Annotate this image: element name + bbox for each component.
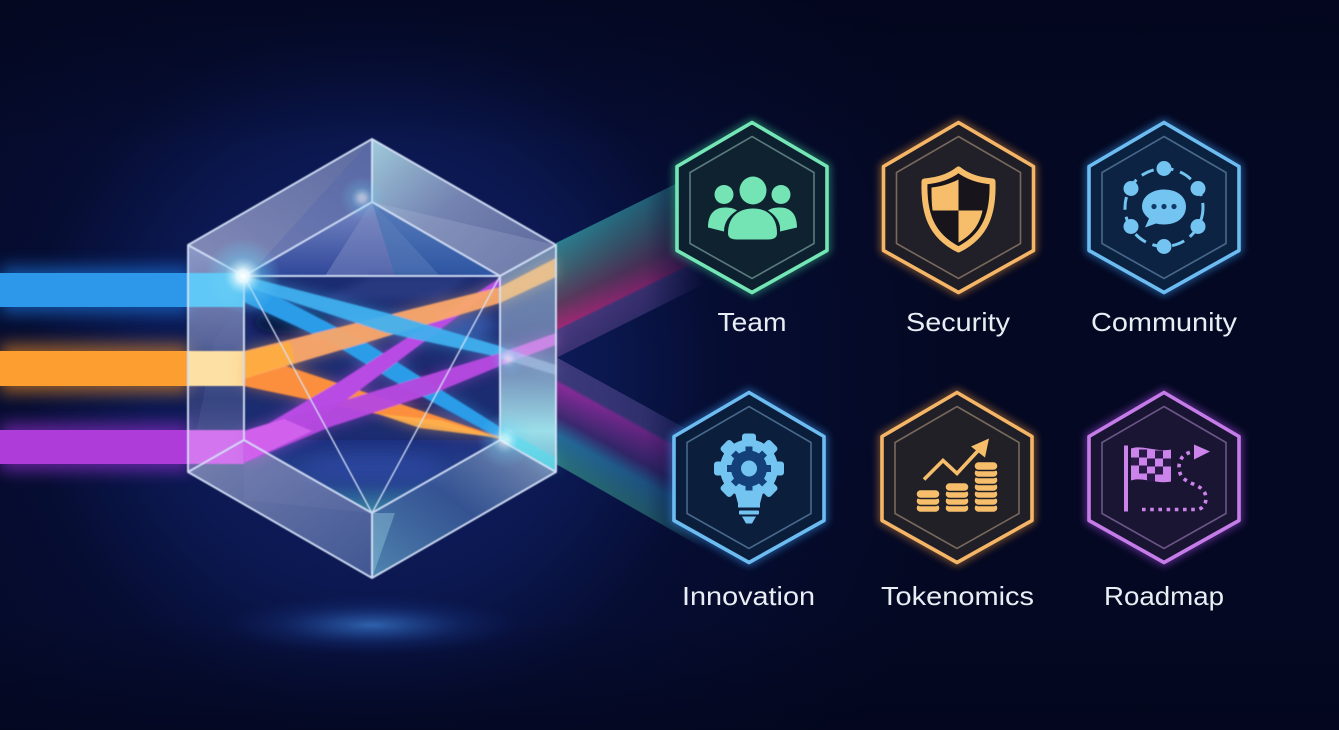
label: Team: [718, 307, 786, 337]
beam: lower fan: [556, 358, 698, 544]
floor glow beneath prism: [222, 595, 522, 655]
item: Innovation: [674, 392, 824, 611]
hexagon badge: green: [677, 122, 827, 292]
light glints: [205, 176, 533, 468]
hexagon badge: orange: [884, 122, 1034, 292]
icon: coins and rising arrow: [916, 438, 998, 512]
item: Roadmap: [1089, 392, 1239, 611]
ray: orange ascending: [244, 287, 500, 379]
prism edges: [188, 139, 556, 578]
label: Roadmap: [1104, 581, 1224, 611]
item: Community: [1089, 122, 1239, 337]
hexagon badge: blue: [1089, 122, 1239, 292]
ray: orange descending: [244, 352, 500, 439]
refracted beams leaving the prism: [556, 184, 698, 544]
label: Security: [906, 307, 1010, 337]
ray: blue upper: [244, 276, 503, 358]
ray: purple long: [244, 278, 501, 460]
icon: people: [708, 176, 797, 240]
icon: gear light bulb: [714, 434, 784, 524]
beam: orange: [0, 344, 190, 393]
beam: purple: [0, 423, 190, 471]
exit ray: blue: [500, 347, 556, 375]
hexagon badge: purple: [1089, 392, 1239, 562]
ray glow halo: [244, 258, 556, 472]
item: Security: [884, 122, 1034, 337]
hexagon badge: orange: [882, 392, 1032, 562]
hexagon badge: blue: [674, 392, 824, 562]
item: Tokenomics: [881, 392, 1034, 611]
label: Tokenomics: [881, 581, 1034, 611]
icon: community network: [1124, 161, 1206, 254]
item: Team: [677, 122, 827, 337]
prism side faces: [188, 139, 556, 578]
exit ray: purple: [500, 333, 556, 366]
ray: purple shallow: [244, 353, 500, 463]
beam: upper fan: [556, 184, 695, 358]
beam: blue: [0, 266, 190, 314]
internal refracted rays: [244, 258, 556, 472]
light passing through left face: [188, 273, 244, 464]
icon: shield: [924, 170, 993, 250]
ray highlights: [244, 342, 295, 379]
icon: checkered flag and dotted path: [1124, 444, 1210, 512]
label: Community: [1091, 307, 1237, 337]
prism inner core: [244, 202, 500, 513]
exit ray: cyan: [497, 427, 556, 472]
label: Innovation: [682, 581, 815, 611]
ray: blue lower: [244, 279, 500, 437]
incoming light beams: [0, 266, 190, 471]
exit ray: orange: [500, 258, 556, 303]
glass prism: [188, 139, 556, 578]
